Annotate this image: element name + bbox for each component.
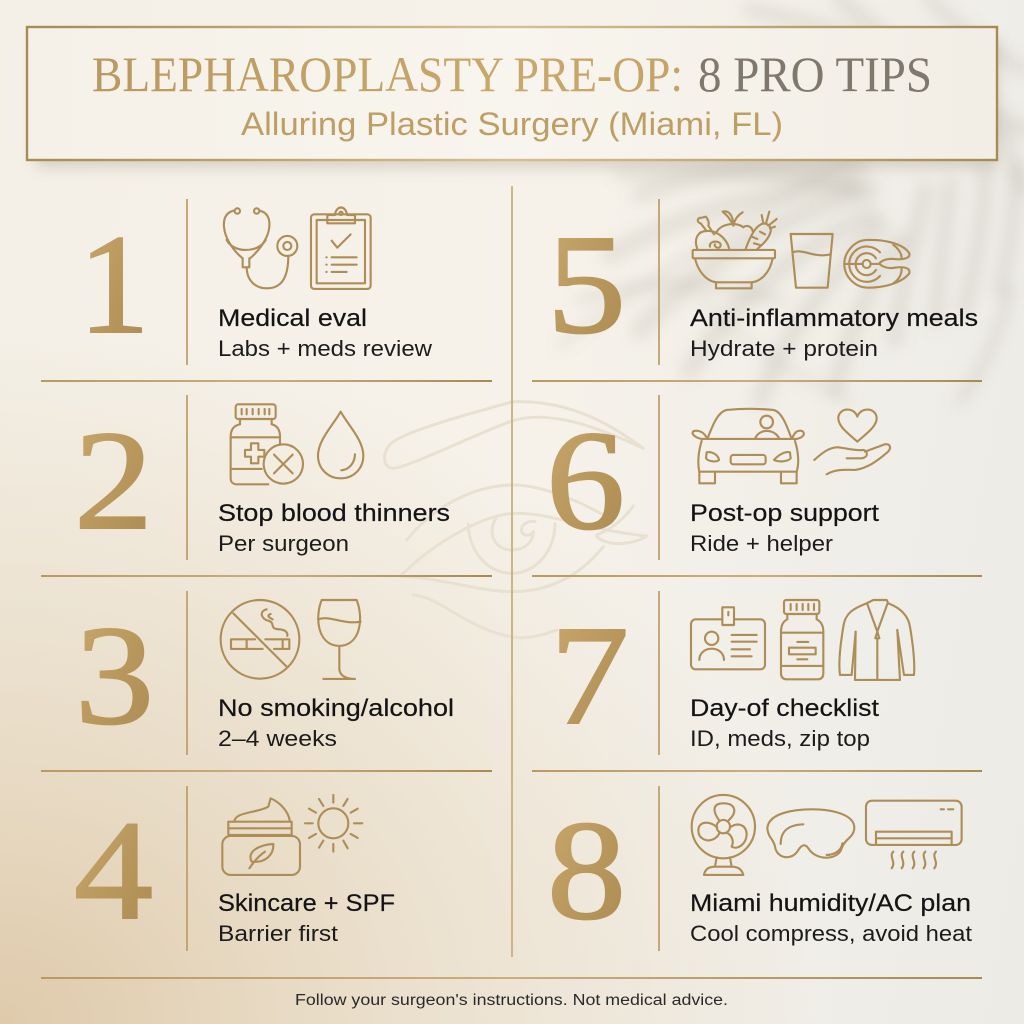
disclaimer text: Follow your surgeon's instructions. Not medical advice. — [295, 992, 728, 1009]
heading: Stop blood thinners — [218, 500, 450, 527]
heading: Day-of checklist — [690, 695, 879, 722]
title: BLEPHAROPLASTY PRE-OP: — [92, 46, 683, 102]
icon: salmon steak — [844, 240, 909, 288]
icon: food bowl — [693, 211, 777, 288]
background palm shadow — [560, 0, 1024, 400]
subtitle: Alluring Plastic Surgery (Miami, FL) — [241, 106, 783, 142]
grid dividers — [41, 186, 982, 957]
icon: cream jar — [222, 798, 300, 875]
icon: heart in hand — [814, 410, 890, 474]
icon: glass of water — [791, 234, 833, 288]
subheading: Barrier first — [218, 921, 339, 946]
icon: medicine bottle — [781, 600, 823, 679]
icon: car with driver — [693, 409, 804, 483]
heading: Medical eval — [218, 305, 367, 332]
subheading: Labs + meds review — [218, 336, 433, 361]
subheading: ID, meds, zip top — [690, 726, 870, 751]
icon: ID badge — [691, 607, 765, 669]
number 7: 7 — [550, 596, 629, 754]
icon: wine glass — [318, 600, 361, 679]
number 8: 8 — [547, 791, 626, 949]
panel: tip 8 — [547, 791, 973, 949]
subheading: Ride + helper — [690, 531, 834, 556]
panel: tip 7 — [550, 596, 914, 754]
heading: No smoking/alcohol — [218, 695, 454, 722]
icon: medicine bottle with cross — [231, 404, 303, 484]
panel: tip 6 — [546, 401, 890, 559]
icon: desk fan — [692, 795, 755, 875]
number 6: 6 — [546, 401, 625, 559]
subheading: Cool compress, avoid heat — [690, 921, 973, 946]
icon: clipboard — [311, 207, 371, 289]
heading: Skincare + SPF — [218, 890, 395, 917]
panel: tip 3 — [75, 596, 454, 754]
icon: no smoking — [221, 600, 299, 679]
panel: tip 5 — [547, 205, 978, 363]
icon: sleep mask — [767, 809, 854, 858]
heading: Miami humidity/AC plan — [690, 890, 971, 917]
icon: blood drop — [318, 412, 363, 478]
title: 8 PRO TIPS — [698, 46, 932, 102]
icon: air conditioner — [866, 801, 962, 868]
panel: tip 1 — [78, 205, 433, 363]
icon: stethoscope — [224, 208, 297, 288]
header banner — [27, 27, 998, 168]
subheading: Per surgeon — [218, 531, 349, 556]
heading: Post-op support — [690, 500, 879, 527]
subheading: 2–4 weeks — [218, 726, 337, 751]
subheading: Hydrate + protein — [690, 336, 878, 361]
number 2: 2 — [74, 401, 153, 559]
number 5: 5 — [547, 205, 626, 363]
panel: tip 2 — [74, 401, 450, 559]
number 1: 1 — [78, 205, 150, 363]
banner panel — [27, 27, 997, 160]
icon: zip-up jacket — [839, 600, 914, 680]
heading: Anti-inflammatory meals — [690, 305, 978, 332]
number 3: 3 — [75, 596, 154, 754]
banner shadow — [36, 40, 998, 168]
background eye watermark — [385, 402, 647, 638]
icon: sun — [305, 795, 362, 852]
panel: tip 4 — [74, 791, 395, 949]
number 4: 4 — [74, 791, 153, 949]
